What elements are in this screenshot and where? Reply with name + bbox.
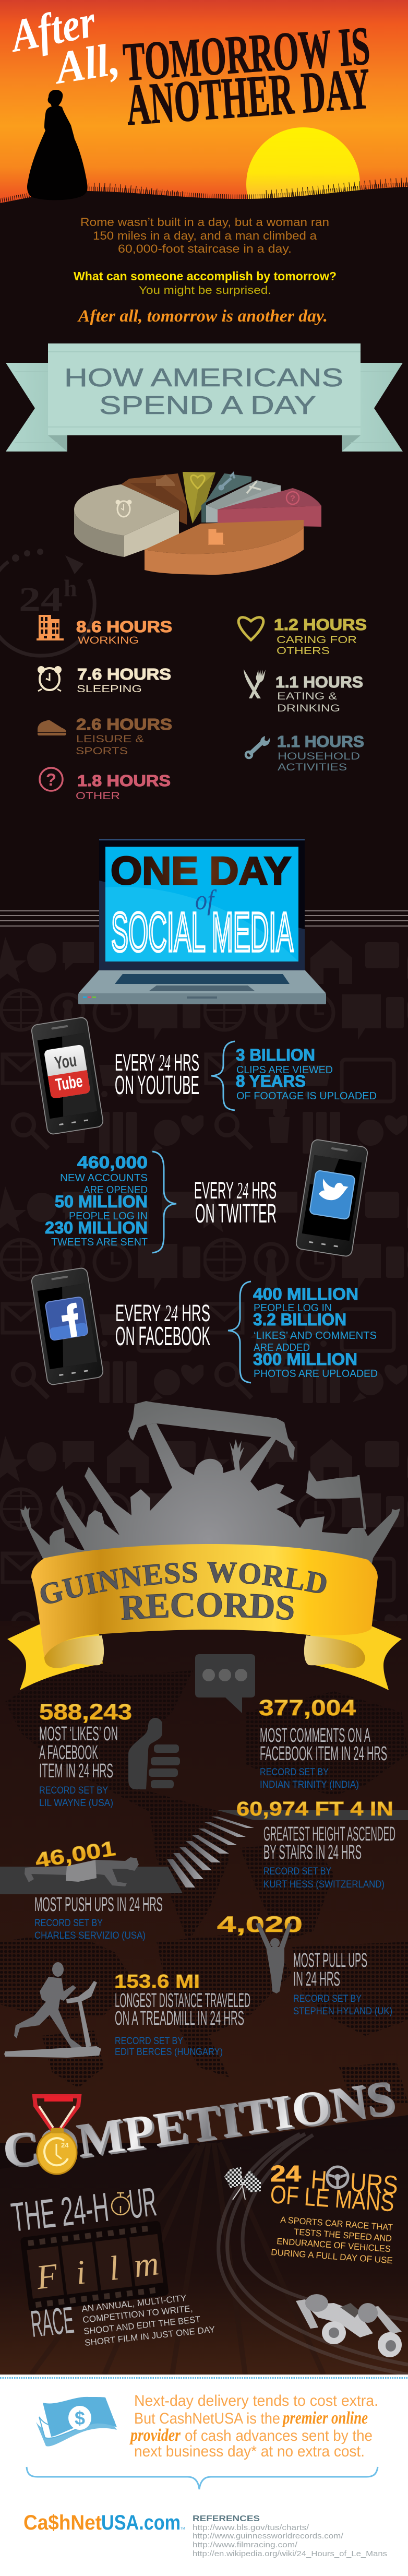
slice: other [218, 488, 321, 527]
icon: gold medal [34, 2096, 79, 2174]
twitter stats: PEOPLE LOG IN [69, 1210, 148, 1222]
icon: question mark: ? [46, 770, 56, 789]
twitter stats: 460,000 [77, 1153, 148, 1172]
facebook stats: PEOPLE LOG IN [254, 1302, 332, 1314]
logo: cashnetusa: USA.com [101, 2511, 181, 2534]
hours [310, 2165, 399, 2200]
slice: working [145, 520, 304, 575]
icon: speech bubble [195, 1654, 255, 1713]
facebook stats: 3.2 BILLION [253, 1310, 346, 1329]
record: facebook likes: RECORD SET BY [39, 1785, 108, 1796]
intro text: 150 miles in a day, and a man climbed a [93, 229, 317, 242]
youtube stats: 3 BILLION [236, 1046, 315, 1064]
platform [218, 1810, 408, 1820]
competition: 24 hours of le mans: DURING A FULL DAY OF USE [271, 2247, 393, 2265]
legend item: caring for others [238, 615, 367, 657]
hillside with grass [0, 182, 408, 245]
number: 46,001: 46,001 [34, 1837, 117, 1872]
facebook stats: PHOTOS ARE UPLOADED [254, 1368, 378, 1380]
facebook stats [253, 1285, 378, 1380]
title script: After All, [5, 0, 123, 94]
references: http://www.guinnessworldrecords.com/ [193, 2532, 344, 2541]
facebook stats: ARE ADDED [254, 1342, 310, 1354]
brace: footer [27, 2467, 378, 2489]
legend item: leisure and sports: LEISURE & [76, 734, 144, 745]
logo: cashnetusa: Ca$hNet [23, 2511, 102, 2534]
record: stairs [167, 1798, 408, 1890]
icon: heart [238, 618, 263, 640]
icon: stopwatch [112, 2193, 130, 2215]
text: ON FACEBOOK [115, 1321, 210, 1351]
references: http://www.bls.gov/tus/charts/ [193, 2523, 309, 2532]
legend item: working [37, 615, 172, 646]
youtube stats: 8 YEARS [236, 1072, 306, 1090]
ribbon tails [7, 1624, 103, 1690]
record: pull ups: STEPHEN HYLAND (UK) [293, 2006, 392, 2017]
record: treadmill: RECORD SET BY [115, 2036, 183, 2047]
references [193, 2514, 387, 2558]
laptop lid [99, 839, 305, 970]
competitions dark road background [0, 2115, 408, 2375]
slice: eating [206, 480, 281, 523]
icon: thumbs up [128, 1718, 180, 1789]
laptop: one day of social media [78, 839, 326, 1004]
intro text: After all, tomorrow is another day. [77, 307, 328, 326]
legend item: leisure and sports [38, 715, 172, 757]
icon: steering wheel [327, 2167, 348, 2188]
twitter stats [45, 1153, 148, 1248]
intro text: 60,000-foot staircase in a day. [118, 242, 292, 255]
slice: caring [183, 472, 215, 524]
record: push ups: MOST PUSH UPS IN 24 HRS [34, 1894, 163, 1916]
record: stairs: RECORD SET BY [263, 1866, 331, 1877]
competition: 24 hours of le mans: TESTS THE SPEED AND [294, 2227, 392, 2243]
heading: the 24-hour: UR [127, 2178, 159, 2227]
youtube phone [31, 1017, 104, 1135]
film strip: l [107, 2249, 121, 2288]
brace: twitter [152, 1152, 176, 1253]
icon: youtube: Tube [54, 1071, 84, 1095]
tire tracks [219, 2134, 408, 2375]
record: facebook likes: MOST ‘LIKES’ ON [39, 1723, 118, 1745]
record: treadmill: 153.6 MI [114, 1970, 200, 1992]
legend item: caring for others: CARING FOR [277, 635, 357, 646]
heading: one day: ONE DAY [111, 849, 291, 893]
title: tomorrow is another day [122, 16, 373, 138]
twitter stats: TWEETS ARE SENT [51, 1237, 148, 1248]
record: push ups [0, 1837, 183, 1941]
gold ribbon: guinness world records: RECORDS [120, 1593, 294, 1620]
icon: money [36, 2397, 117, 2447]
twitter stats: 50 MILLION [55, 1192, 148, 1211]
gold ribbon: guinness world records [7, 1544, 402, 1690]
record: stairs: KURT HESS (SWITZERLAND) [263, 1879, 385, 1890]
youtube stats [236, 1046, 377, 1102]
hero sunset scene [0, 0, 408, 245]
icon: building [37, 615, 64, 640]
heading: competitions: COMPETITIONS [0, 2070, 397, 2178]
legend item: leisure and sports: SPORTS [76, 746, 128, 757]
text: ON TWITTER [195, 1198, 277, 1228]
competition: 24 hours of le mans [224, 2161, 399, 2265]
legend item: eating and drinking [244, 669, 363, 714]
raised scarf [128, 1401, 295, 1461]
references: http://en.wikipedia.org/wiki/24_Hours_of_Le_Mans [193, 2549, 387, 2558]
record: facebook comments: RECORD SET BY [260, 1767, 329, 1778]
twitter stats: 230 MILLION [45, 1218, 148, 1237]
slice: household [201, 473, 251, 523]
icon: twitter [309, 1170, 355, 1220]
youtube stats: OF FOOTAGE IS UPLOADED [236, 1090, 377, 1102]
icon: fork and knife [244, 669, 266, 698]
woman silhouette [27, 90, 88, 200]
legend item: eating and drinking: 1.1 HOURS [275, 673, 363, 691]
crowd silhouette [20, 1401, 400, 1576]
intro text: What can someone accomplish by tomorrow? [74, 269, 337, 283]
legend item: household activities: ACTIVITIES [278, 762, 347, 773]
legend item: sleeping: SLEEPING [77, 684, 142, 695]
ribbon banner: how americans spend a day: HOW AMERICANS [64, 364, 343, 392]
icon: staircase [167, 1817, 254, 1888]
record: pull ups [217, 1912, 392, 2017]
legend item: leisure and sports: 2.6 HOURS [76, 715, 172, 733]
competition: 24-hour film race: SHORT FILM IN JUST ONE DAY [84, 2324, 215, 2348]
watermark: 24h clock [0, 549, 94, 656]
promo text: of cash advances sent by the [185, 2427, 373, 2444]
icon: youtube [44, 1044, 91, 1099]
twitter phone [295, 1139, 368, 1257]
competition: 24 hours of le mans: ENDURANCE OF VEHICLES [277, 2236, 391, 2254]
facebook stats: ‘LIKES’ AND COMMENTS [254, 1330, 377, 1342]
record: pull ups: 4,020 [217, 1912, 303, 1937]
screen [105, 847, 298, 961]
ribbon banner: how americans spend a day: SPEND A DAY [99, 391, 316, 420]
record: facebook comments [259, 1695, 387, 1790]
record: facebook likes: A FACEBOOK [39, 1742, 98, 1764]
watermark: 24h clock: h [64, 575, 77, 601]
logo: cashnetusa [23, 2511, 185, 2534]
legend item: sleeping [38, 665, 171, 695]
legend item: household activities [246, 732, 364, 773]
legend item: household activities: HOUSEHOLD [278, 751, 360, 762]
legend item: caring for others: 1.2 HOURS [274, 615, 367, 634]
laptop base [78, 970, 326, 1004]
promo text [129, 2392, 378, 2460]
intro text [74, 216, 337, 326]
promo text: premier online [282, 2408, 368, 2428]
youtube heading [115, 1049, 199, 1100]
facebook heading [115, 1300, 210, 1351]
record: pull ups: IN 24 HRS [293, 1968, 340, 1990]
twitter heading [194, 1177, 277, 1228]
film strip: i [74, 2253, 88, 2292]
brace: youtube [211, 1041, 235, 1110]
competition: 24 hours of le mans: A SPORTS CAR RACE THAT [280, 2215, 393, 2233]
record: push ups: RECORD SET BY [34, 1918, 103, 1929]
icon: alarm clock [38, 666, 62, 691]
pull up figure [256, 1923, 292, 1993]
record: facebook comments: 377,004 [259, 1695, 356, 1720]
sun [246, 127, 360, 241]
heading text [39, 1582, 366, 1607]
slice: other: ? [290, 494, 295, 503]
ribbon face [31, 1544, 378, 1657]
ribbon banner: how americans spend a day [6, 343, 403, 452]
legend item: other [40, 768, 171, 802]
record: facebook likes: ITEM IN 24 HRS [39, 1760, 113, 1782]
icon: facebook [45, 1297, 88, 1340]
promo text: next business day* at no extra cost. [134, 2443, 365, 2460]
youtube stats: CLIPS ARE VIEWED [236, 1064, 333, 1076]
references: http://www.filmracing.com/ [193, 2541, 298, 2549]
competition: 24-hour film race [9, 2178, 215, 2348]
references: REFERENCES [193, 2514, 260, 2523]
promo text: provider [129, 2426, 181, 2445]
icon: checkered flags [224, 2167, 261, 2200]
legend item: eating and drinking: DRINKING [277, 703, 340, 714]
watermark: 24h clock: 24 [19, 580, 63, 619]
footer panel [0, 2375, 408, 2576]
social section background pattern [0, 927, 408, 1631]
heading: the 24-hour: THE 24-H [9, 2184, 111, 2240]
sky [0, 0, 408, 209]
record: pull ups: RECORD SET BY [293, 1993, 362, 2004]
title script: After All,: All, [50, 34, 123, 94]
record: treadmill [4, 1962, 250, 2058]
dotted world map [0, 1665, 408, 2109]
promo text: But CashNetUSA is the [134, 2410, 280, 2427]
push up figure [25, 1857, 139, 1886]
icon: money: $ [75, 2407, 85, 2429]
hours: H [310, 2165, 328, 2195]
legend item: working: WORKING [78, 635, 139, 646]
record: treadmill: EDIT BERCES (HUNGARY) [115, 2047, 223, 2058]
record: facebook likes: LIL WAYNE (USA) [39, 1798, 113, 1809]
record: treadmill: ON A TREADMILL IN 24 HRS [115, 2008, 244, 2029]
slice: sleeping [74, 484, 179, 557]
hours: URS [349, 2167, 399, 2200]
records section background [0, 1621, 408, 2143]
icon: gold medal: 24 [61, 2141, 69, 2149]
facebook stats: 400 MILLION [253, 1285, 358, 1303]
competition: 24-hour film race: RACE [29, 2299, 76, 2345]
facebook heading: EVERY 24 HRS [115, 1300, 210, 1326]
text: ON YOUTUBE [115, 1070, 199, 1100]
3D pie chart [74, 472, 321, 575]
promo text: Next-day delivery tends to cost extra. [134, 2392, 378, 2409]
film strip [20, 2221, 169, 2312]
film strip: m [131, 2244, 161, 2285]
legend item: working: 8.6 HOURS [76, 618, 172, 636]
ribbon folds [44, 1635, 104, 1668]
facebook phone [31, 1267, 104, 1385]
intro text: You might be surprised. [139, 284, 271, 296]
icon: question mark [40, 768, 63, 791]
twitter stats: NEW ACCOUNTS [60, 1172, 148, 1184]
gold ribbon: guinness world records: GUINNESS WORLD [41, 1562, 327, 1604]
icon: youtube: You [53, 1050, 78, 1073]
facebook stats: 300 MILLION [253, 1350, 357, 1369]
legend item: other: 1.8 HOURS [77, 771, 171, 790]
icon: wrench [246, 736, 270, 758]
competition: 24-hour film race: SHOOT AND EDIT THE BEST [83, 2314, 201, 2336]
brace: facebook [228, 1281, 251, 1383]
competition: 24-hour film race: AN ANNUAL, MULTI-CITY [81, 2293, 187, 2314]
legend item: eating and drinking: EATING & [277, 691, 337, 702]
heading: of: of [195, 884, 217, 916]
film strip: F [34, 2257, 60, 2297]
icon: race car [296, 2294, 402, 2357]
record: facebook likes [39, 1700, 132, 1809]
record: push ups: CHARLES SERVIZIO (USA) [34, 1930, 146, 1941]
record: stairs: 60,974 FT 4 IN [236, 1798, 393, 1820]
legend item: caring for others: OTHERS [277, 646, 330, 657]
logo: cashnetusa: TM [181, 2527, 185, 2531]
dotted divider [0, 2377, 408, 2379]
record: facebook comments: INDIAN TRINITY (INDIA) [260, 1779, 359, 1790]
icon: sneaker [38, 720, 66, 735]
treadmill runner [4, 1962, 101, 2058]
record: facebook likes: 588,243 [39, 1700, 132, 1725]
competition: 24-hour film race: COMPETITION TO WRITE, [82, 2304, 193, 2325]
twitter stats: ARE OPENED [83, 1184, 148, 1196]
legend item: sleeping: 7.6 HOURS [77, 665, 171, 683]
intro text: Rome wasn’t built in a day, but a woman ran [80, 216, 329, 229]
slice: leisure [121, 473, 187, 525]
horizontal stripes behind laptop [0, 911, 408, 926]
twitter heading: EVERY 24 HRS [194, 1177, 277, 1204]
youtube heading: EVERY 24 HRS [115, 1049, 199, 1076]
legend item: other: OTHER [76, 791, 120, 802]
legend item: household activities: 1.1 HOURS [277, 732, 364, 751]
competition: 24 hours of le mans: 24 [270, 2161, 302, 2187]
floor mat [0, 1867, 183, 1894]
flag [306, 1470, 366, 1529]
